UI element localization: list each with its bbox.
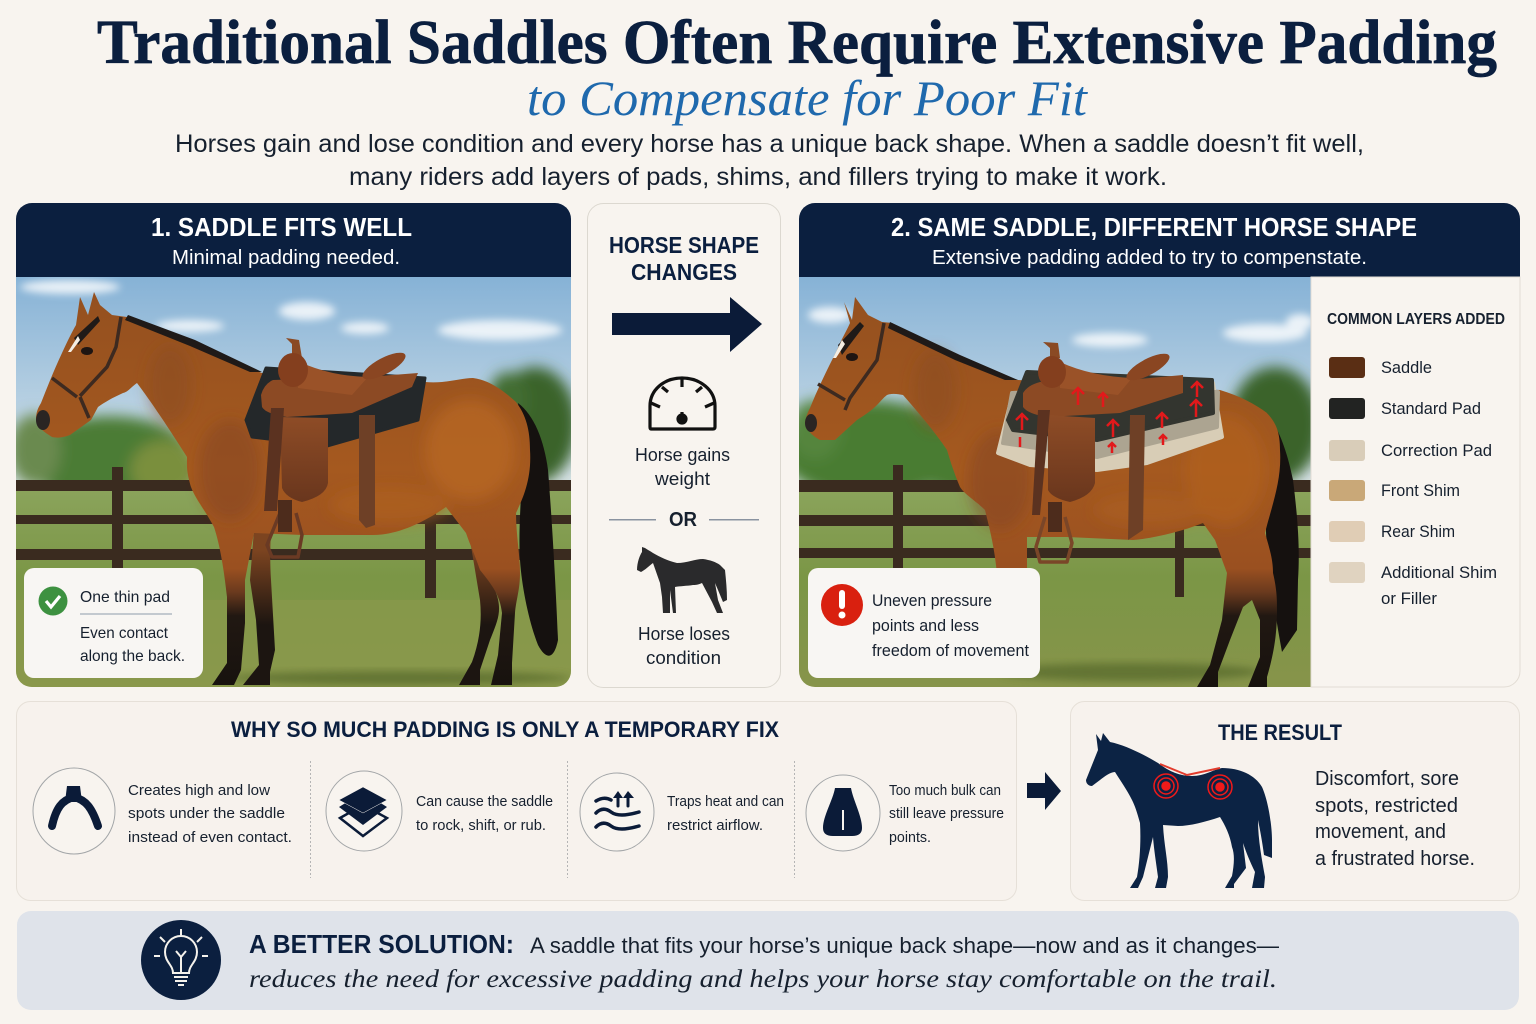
- result text: a frustrated horse.: [1315, 848, 1475, 870]
- muscle shading: [913, 350, 1265, 530]
- red pressure arrows: [1016, 382, 1203, 453]
- or divider: OR: [669, 509, 698, 531]
- heading: THE RESULT: [1218, 720, 1343, 745]
- legend: front shim: [1329, 480, 1460, 501]
- icon: layers: [326, 771, 402, 851]
- text: horse gains weight: weight: [654, 469, 710, 489]
- item: high and low spots: spots under the saddle: [128, 805, 285, 822]
- muscle shading: [148, 345, 515, 523]
- text: horse loses condition: condition: [646, 648, 721, 668]
- bridle: [818, 323, 884, 410]
- ground shadow: [230, 671, 570, 685]
- item: bulk pressure points: Too much bulk can: [889, 782, 1001, 799]
- item: traps heat: Traps heat and can: [667, 793, 784, 810]
- item: bulk pressure points: [806, 775, 1004, 851]
- solution text: reduces the need for excessive padding and helps your horse stay comfortable on the trail.: [249, 966, 1277, 993]
- panel 2 header: 2. SAME SADDLE, DIFFERENT HORSE SHAPE: [891, 212, 1417, 242]
- panel: saddle fits well: [9, 203, 577, 687]
- callout: uneven pressure: [808, 568, 1040, 678]
- item: rock, shift, rub: [326, 771, 553, 851]
- photo: horse with extensive padding: [780, 277, 1321, 687]
- fence: [799, 465, 1311, 597]
- fence: [16, 467, 571, 598]
- heading: [609, 232, 759, 285]
- intro text: [175, 130, 1364, 191]
- item: bulk pressure points: points.: [889, 829, 931, 846]
- legend: rear shim: Rear Shim: [1381, 522, 1455, 541]
- callout: one thin pad: [24, 568, 203, 678]
- bridle: [52, 317, 121, 418]
- legend: common layers added: COMMON LAYERS ADDED: [1327, 311, 1505, 328]
- text: horse gains weight: Horse gains: [635, 445, 730, 465]
- legend: additional shim or filler: or Filler: [1381, 589, 1437, 608]
- legend: correction pad: [1329, 440, 1492, 461]
- saddle: [261, 338, 418, 557]
- mane: [125, 315, 262, 372]
- legend: front shim: Front Shim: [1381, 481, 1460, 500]
- legend: correction pad: Correction Pad: [1381, 441, 1492, 460]
- arrow to result: [1027, 772, 1061, 810]
- nose: [805, 414, 817, 432]
- photo: horse with well-fitted saddle: [9, 277, 577, 687]
- callout: uneven pressure: Uneven pressure: [872, 591, 992, 610]
- icon: thin horse silhouette: [637, 547, 727, 613]
- text: horse loses condition: [638, 624, 730, 668]
- result text: Discomfort, sore: [1315, 768, 1459, 790]
- white star: [68, 336, 80, 352]
- eye: [81, 347, 93, 355]
- icon: heat waves: [580, 773, 654, 851]
- intro text: Horses gain and lose condition and every horse has a unique back shape. When a saddle doesn’t fit well,: [175, 130, 1364, 158]
- horse silhouette with pressure points: [1086, 733, 1272, 888]
- solution text: A saddle that fits your horse’s unique back shape—now and as it changes—: [530, 933, 1279, 958]
- black saddle pad: [246, 368, 425, 446]
- far legs: [243, 530, 499, 685]
- panel: same saddle, different horse shape: [16, 203, 1520, 1010]
- item: rock, shift, rub: to rock, shift, or rub.: [416, 817, 546, 834]
- horse body: [36, 292, 530, 685]
- title: Traditional Saddles Often Require Extensive Padding: [97, 9, 1497, 77]
- legend: additional shim or filler: [1329, 562, 1497, 608]
- item: traps heat: [580, 773, 784, 851]
- icon: green check: [38, 586, 68, 616]
- item: rock, shift, rub: Can cause the saddle: [416, 793, 553, 810]
- item: bulk pressure points: still leave pressure: [889, 805, 1004, 822]
- legend: standard pad: Standard Pad: [1381, 399, 1481, 418]
- text: horse loses condition: Horse loses: [638, 624, 730, 644]
- item: high and low spots: instead of even contact.: [128, 829, 292, 846]
- eye: [846, 353, 858, 361]
- callout: uneven pressure: freedom of movement: [872, 641, 1029, 660]
- result text: movement, and: [1315, 821, 1446, 843]
- panel 1 header: 1. SADDLE FITS WELL: [151, 212, 412, 242]
- panel 1 header: Minimal padding needed.: [172, 247, 400, 269]
- result text: [1315, 768, 1475, 870]
- mane: [888, 322, 1018, 380]
- heading: CHANGES: [631, 259, 737, 285]
- legend: saddle: Saddle: [1381, 358, 1432, 377]
- result text: spots, restricted: [1315, 795, 1458, 817]
- nose: [36, 410, 50, 430]
- tail: [1266, 413, 1299, 652]
- icon: arch: [33, 768, 115, 854]
- callout: one thin pad: along the back.: [80, 648, 185, 665]
- arrow: [612, 297, 762, 352]
- icon: bulk: [806, 775, 880, 851]
- heading: HORSE SHAPE: [609, 232, 759, 258]
- legend: saddle: [1329, 357, 1432, 378]
- intro text: many riders add layers of pads, shims, and fillers trying to make it work.: [349, 163, 1167, 191]
- text: horse gains weight: [635, 445, 730, 489]
- item: traps heat: restrict airflow.: [667, 817, 763, 834]
- panel: the result: [1070, 702, 1520, 900]
- icon: gauge: [650, 378, 715, 429]
- heading: WHY SO MUCH PADDING IS ONLY A TEMPORARY FIX: [231, 717, 779, 742]
- item: high and low spots: [33, 768, 292, 854]
- panel: horse shape changes: [588, 204, 780, 688]
- legend: standard pad: [1329, 398, 1481, 419]
- saddle: [1023, 342, 1183, 562]
- pressure point left: [1154, 774, 1178, 798]
- item: high and low spots: Creates high and low: [128, 782, 270, 799]
- white star: [833, 340, 845, 358]
- callout: uneven pressure: points and less: [872, 616, 979, 635]
- panel: why padding is a temporary fix: [16, 702, 1016, 900]
- panel 2 header: [799, 203, 1520, 277]
- callout: one thin pad: One thin pad: [80, 589, 170, 606]
- tail: [518, 403, 558, 656]
- solution text: A BETTER SOLUTION:: [249, 929, 514, 959]
- panel 2 header: Extensive padding added to try to compenstate.: [932, 247, 1367, 269]
- banner: a better solution: [17, 911, 1519, 1010]
- legend: rear shim: [1329, 521, 1455, 542]
- icon: light bulb: [141, 920, 221, 1000]
- panel 1 header: [16, 203, 571, 277]
- legend: common layers added: [1311, 277, 1520, 687]
- horse body: [805, 297, 1280, 687]
- pressure point right: [1208, 775, 1232, 799]
- solution text: [249, 929, 1279, 993]
- icon: red alert: [821, 584, 863, 626]
- subtitle: to Compensate for Poor Fit: [527, 70, 1088, 126]
- ground shadow: [1000, 663, 1260, 681]
- legend: additional shim or filler: Additional Shim: [1381, 563, 1497, 582]
- callout: one thin pad: Even contact: [80, 625, 169, 642]
- stacked pads: [998, 372, 1222, 470]
